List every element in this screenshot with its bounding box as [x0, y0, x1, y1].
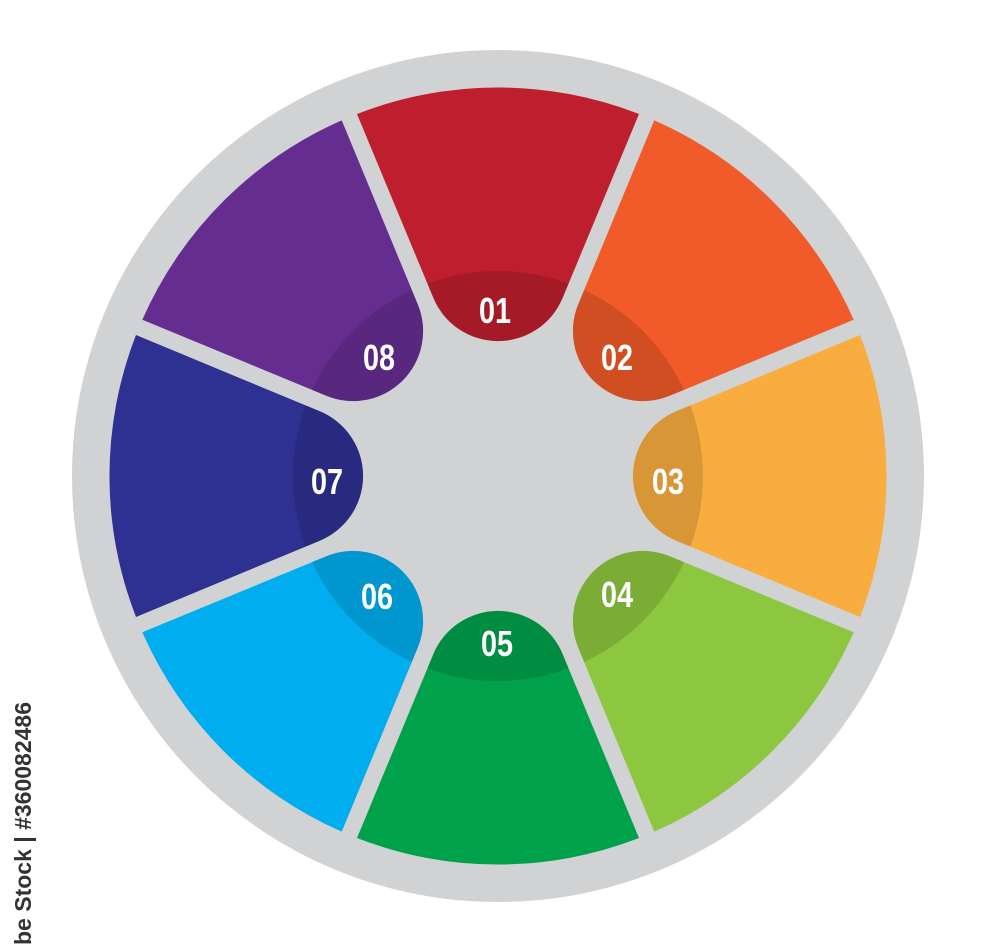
label 08: 08	[363, 337, 395, 378]
segment 04	[494, 472, 872, 850]
outer grey ring	[72, 50, 924, 902]
label 07: 07	[311, 461, 343, 502]
label 04: 04	[601, 574, 633, 615]
segment 01	[357, 87, 639, 341]
label 06: 06	[361, 576, 393, 617]
label 03: 03	[652, 461, 684, 502]
wheel segments	[109, 87, 887, 865]
segment 06	[124, 472, 502, 850]
number labels	[311, 290, 684, 664]
label 05: 05	[481, 623, 513, 664]
inner dark band overlay	[293, 271, 703, 681]
label 02: 02	[601, 337, 633, 378]
segment 08	[124, 102, 502, 480]
segment 07	[109, 335, 363, 617]
segment 02	[494, 102, 872, 480]
segment 03	[633, 335, 887, 617]
segment 05	[357, 611, 639, 865]
label 01: 01	[479, 290, 511, 331]
